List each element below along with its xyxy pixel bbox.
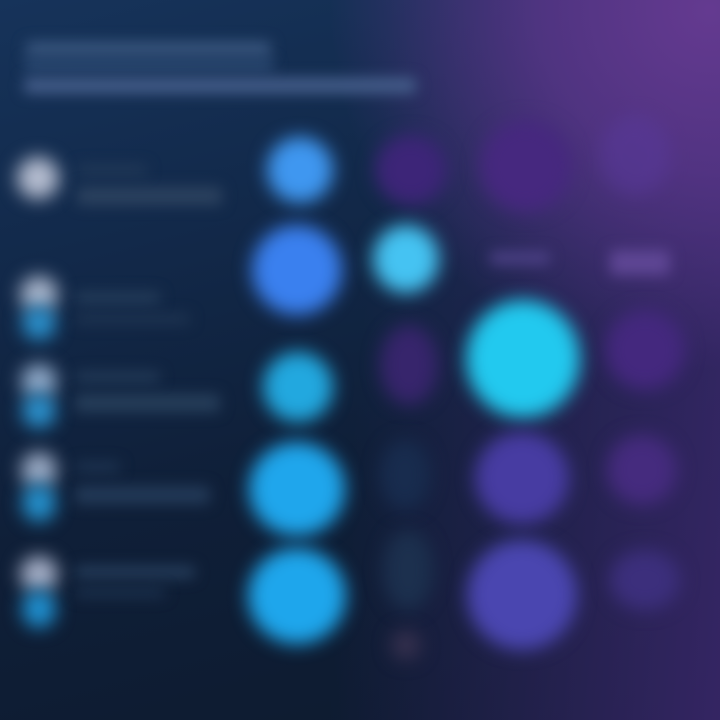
bubble: row 3 column 1 xyxy=(263,352,333,422)
bubble: row 2 column 1 xyxy=(252,225,342,315)
bubble: row 1 column 4 xyxy=(600,115,670,195)
icon: row 2 marker xyxy=(8,264,70,352)
marker: bottom xyxy=(391,630,421,660)
icon: row 1 marker xyxy=(17,157,59,199)
icon: row 4 marker xyxy=(10,441,68,534)
bubble: row 4 column 3 xyxy=(475,432,569,524)
bubble: row 5 column 1 xyxy=(248,548,346,644)
icon: row 3 marker xyxy=(10,352,68,439)
bubble: row 5 column 2 xyxy=(383,530,433,610)
bubble: row 4 column 2 xyxy=(380,440,430,510)
label: row 2 column 4 xyxy=(610,250,670,275)
row 2 label xyxy=(8,264,158,352)
bubble: row 4 column 4 xyxy=(607,435,677,505)
bubble: row 5 column 4 xyxy=(610,550,680,610)
bubble: row 1 column 1 xyxy=(267,137,333,203)
title xyxy=(19,36,420,100)
row 1 label xyxy=(5,145,224,212)
bubble: row 2 column 2 xyxy=(373,225,439,293)
row 5 label xyxy=(8,544,196,640)
bubble: row 5 column 3 xyxy=(467,540,577,650)
chart: bubble matrix xyxy=(234,121,690,663)
row 3 label xyxy=(10,352,222,439)
bubble: row 3 column 4 xyxy=(605,310,685,390)
bubble: row 3 column 2 xyxy=(380,325,438,405)
bubble: row 1 column 2 xyxy=(375,135,447,205)
bubble: row 1 column 3 xyxy=(480,120,572,212)
bubble: row 3 column 3 xyxy=(466,300,580,418)
icon: row 5 marker xyxy=(8,544,70,640)
label: row 2 column 3 xyxy=(490,252,550,264)
row 4 label xyxy=(10,441,212,534)
bubble: row 4 column 1 xyxy=(249,442,345,536)
